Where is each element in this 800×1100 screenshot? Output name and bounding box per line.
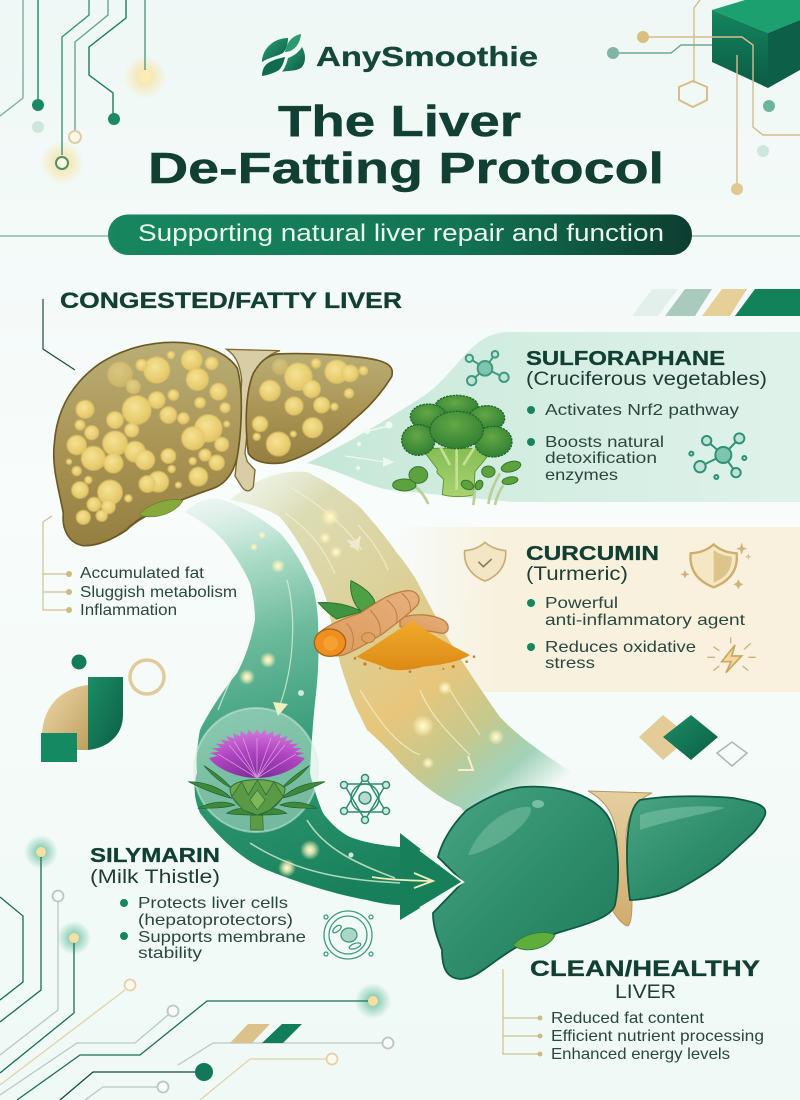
icon: shield left — [465, 542, 506, 581]
stem — [422, 448, 493, 497]
logo — [262, 34, 538, 76]
fatty liver symptoms list — [43, 516, 237, 619]
sulforaphane text: Boosts natural — [545, 434, 664, 451]
flower head — [209, 729, 305, 778]
curcumin text: CURCUMIN — [526, 543, 659, 565]
icon: molecule top — [466, 351, 509, 385]
clean healthy liver text: LIVER — [615, 982, 676, 1003]
arrow head over healthy liver — [372, 834, 463, 920]
roots — [400, 615, 448, 633]
decorative diamonds — [639, 715, 747, 766]
icon: cell — [324, 911, 373, 959]
decorative shapes: left cluster — [41, 654, 164, 762]
fatty liver symptoms list: Inflammation — [80, 602, 177, 619]
leaves — [318, 581, 375, 619]
silymarin text: SILYMARIN — [90, 845, 220, 867]
icon: lightning bolt — [707, 637, 756, 673]
fat globules — [67, 350, 367, 524]
clean healthy liver text: CLEAN/HEALTHY — [530, 956, 760, 981]
decorative stripes: bottom — [230, 1024, 302, 1043]
leaves and stem — [188, 766, 325, 830]
brand name: AnySmoothie — [316, 41, 538, 72]
panel: curcumin background — [395, 527, 800, 692]
flow ribbon: to curcumin gold — [230, 472, 597, 830]
sulforaphane text: enzymes — [545, 467, 618, 484]
sulforaphane text: SULFORAPHANE — [526, 348, 725, 370]
clean healthy liver text — [503, 956, 764, 1063]
heading: congested fatty liver: CONGESTED/FATTY LIVER — [60, 288, 402, 313]
illustration: fatty liver — [54, 342, 392, 546]
title — [148, 97, 664, 193]
circuit lines and hexagon block: top right — [607, 0, 800, 195]
decorative stripes: top right — [632, 289, 800, 316]
illustration: turmeric — [314, 581, 475, 673]
silymarin text: Supports membrane — [138, 929, 306, 946]
icon: molecule lower — [689, 433, 746, 479]
fatty liver symptoms list: Sluggish metabolism — [80, 584, 237, 601]
subtitle pill: Supporting natural liver repair and function — [138, 220, 664, 247]
silymarin text: (Milk Thistle) — [90, 867, 220, 888]
curcumin text: stress — [545, 655, 595, 672]
icon: leaf logo — [262, 34, 305, 76]
sulforaphane text: detoxification — [545, 450, 657, 467]
sulforaphane text: (Cruciferous vegetables) — [526, 369, 767, 390]
curcumin text — [526, 543, 746, 672]
illustration: milk thistle — [188, 708, 325, 832]
icon: shield with sparkles — [680, 543, 752, 589]
title: The Liver — [278, 97, 521, 146]
sulforaphane text — [526, 348, 767, 484]
curcumin text: Reduces oxidative — [545, 639, 696, 656]
title: De-Fatting Protocol — [148, 144, 664, 193]
clean healthy liver text: Enhanced energy levels — [551, 1046, 730, 1063]
icon: atom — [340, 774, 390, 824]
powder — [357, 621, 470, 670]
circuit lines: bottom left — [0, 835, 394, 1100]
clean healthy liver text: Reduced fat content — [551, 1010, 705, 1027]
crown — [402, 395, 512, 457]
clean healthy liver text: Efficient nutrient processing — [551, 1028, 764, 1045]
silymarin text: Protects liver cells — [138, 895, 288, 912]
silymarin text — [90, 845, 306, 962]
panel: sulforaphane background — [307, 332, 800, 502]
fatty liver symptoms list: Accumulated fat — [80, 565, 205, 582]
silymarin text: (hepatoprotectors) — [138, 912, 293, 929]
subtitle pill — [0, 214, 800, 255]
circuit lines: top left — [0, 0, 167, 185]
sulforaphane text: Activates Nrf2 pathway — [545, 402, 739, 419]
silymarin text: stability — [138, 945, 202, 962]
illustration: healthy liver — [433, 787, 765, 979]
flow ribbon: to silymarin with arrow — [185, 499, 463, 920]
sprouts — [393, 459, 522, 505]
callout line: fatty liver — [43, 299, 75, 370]
curcumin text: anti-inflammatory agent — [545, 612, 746, 629]
curcumin text: (Turmeric) — [526, 564, 628, 585]
illustration: broccoli — [393, 395, 522, 505]
curcumin text: Powerful — [545, 595, 618, 612]
